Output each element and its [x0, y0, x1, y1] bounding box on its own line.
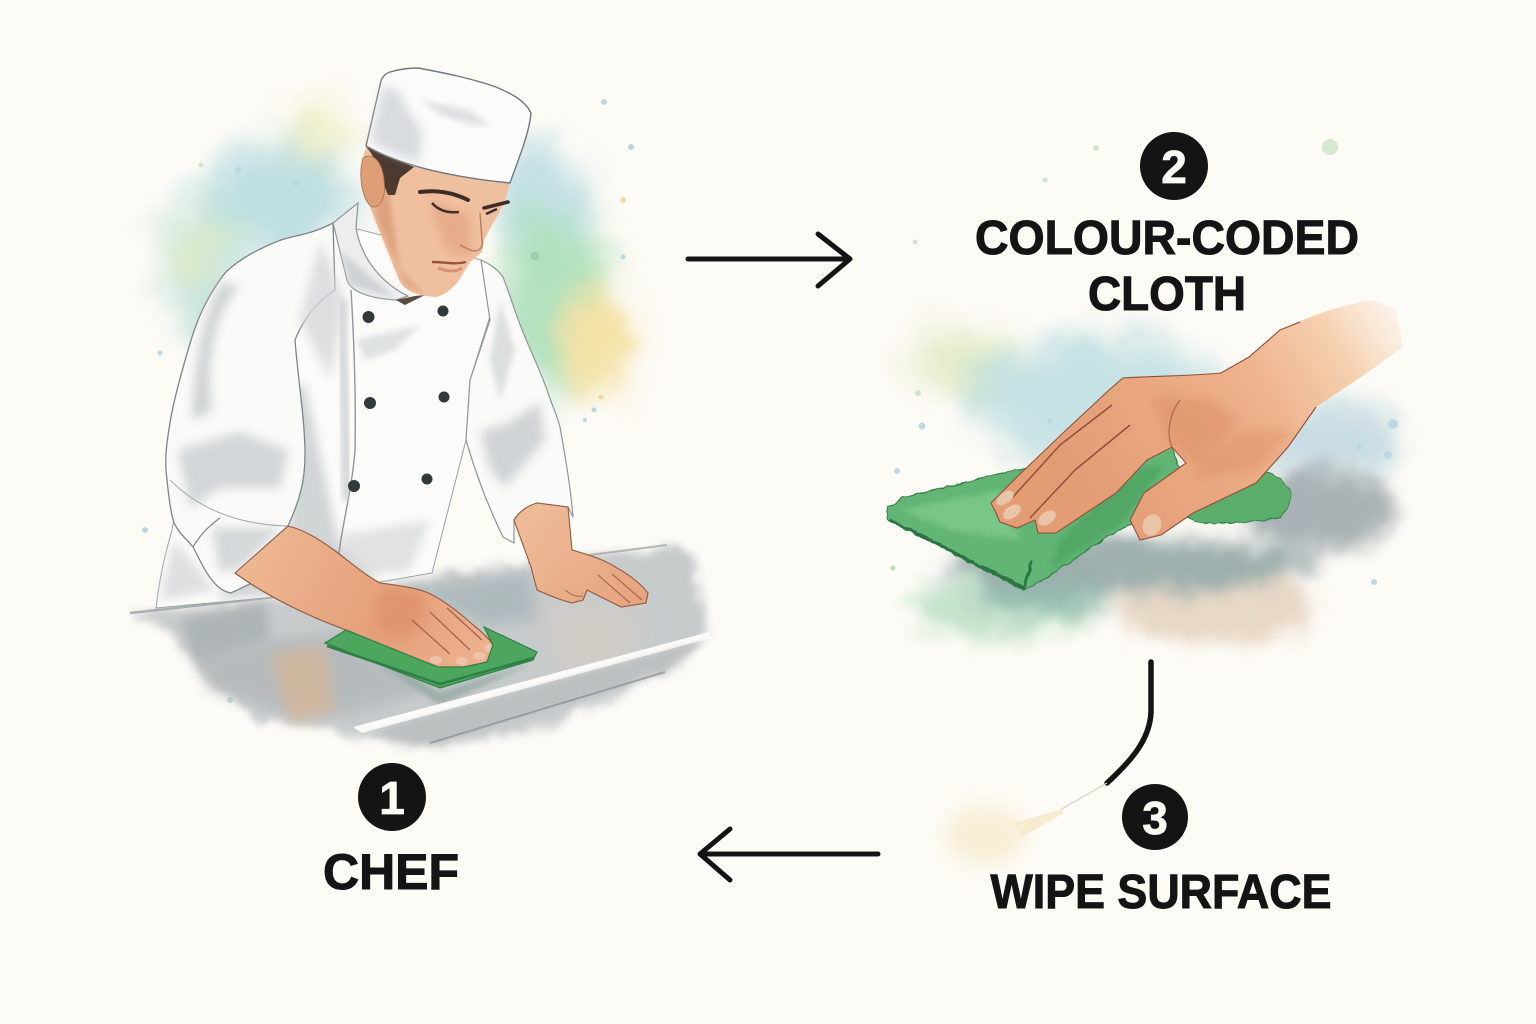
green cloth: [888, 448, 1180, 590]
green cloth right flap: [1186, 470, 1291, 523]
watercolour wash behind hand: [910, 328, 1400, 482]
step 3 label: wipe surface: [990, 784, 1332, 919]
chef hat: [366, 68, 531, 183]
heading: wipe surface: WIPE SURFACE: [990, 866, 1332, 919]
fingernails: [994, 488, 1016, 508]
heading: colour-coded cloth: CLOTH: [1088, 268, 1246, 321]
paint splatter dots: [142, 99, 634, 703]
yellow wash near step 3: [945, 805, 1025, 865]
heading: chef: CHEF: [323, 844, 459, 900]
watercolour wash behind chef: [163, 99, 632, 396]
right sleeve: [466, 260, 573, 543]
number badge 2: [1140, 132, 1208, 200]
splatter dots: [890, 139, 1398, 616]
jacket buttons: [348, 306, 450, 492]
step 1 label: chef: [323, 763, 459, 900]
left sleeve: [166, 223, 345, 593]
heading: colour-coded cloth: COLOUR-CODED: [975, 212, 1359, 265]
chef head: [361, 147, 510, 297]
chef collar: [333, 203, 425, 305]
number badge 3: [1122, 784, 1188, 850]
chef jacket torso: [156, 223, 495, 608]
number badge 3: 3: [1142, 792, 1168, 844]
chef forearms and hands: [235, 503, 648, 667]
heading: colour-coded cloth: [975, 212, 1359, 321]
green cloth: [325, 627, 537, 688]
number badge 2: 2: [1161, 141, 1187, 193]
step 2 label: colour-coded cloth: [975, 132, 1359, 321]
counter shadow and reflections: [905, 468, 1392, 646]
illustration: chef wiping the counter: [128, 68, 711, 748]
forearm and hand: [991, 300, 1403, 540]
number badge 1: 1: [379, 772, 405, 824]
arrow: cloth to wipe surface: [1013, 662, 1151, 837]
illustration: hand wiping with cloth: [888, 139, 1403, 865]
arrow: chef to cloth: [688, 234, 850, 286]
arrow: wipe surface back to chef: [700, 829, 878, 880]
counter: [128, 545, 711, 748]
